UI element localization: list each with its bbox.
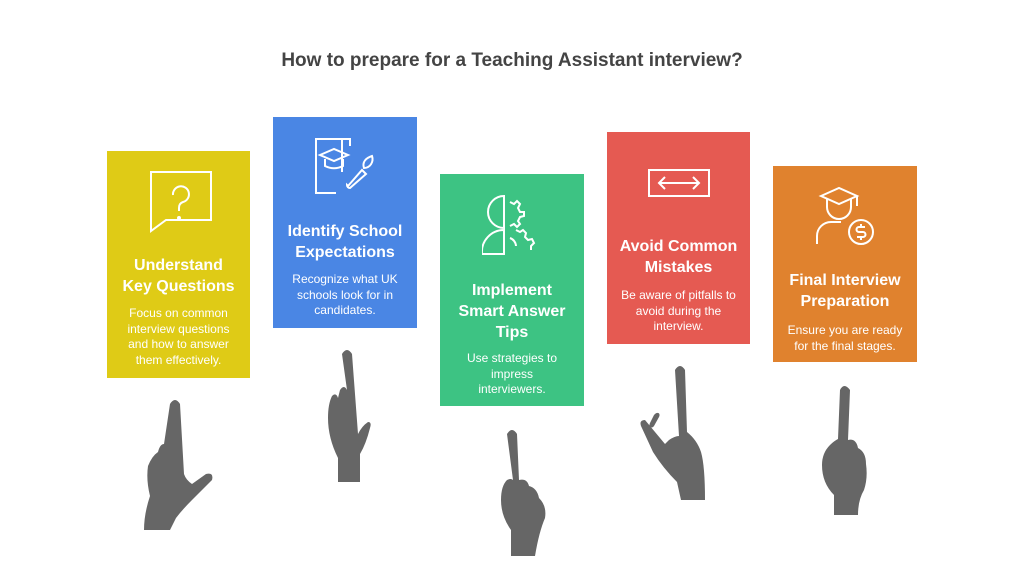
text: Be aware of pitfalls to avoid during the interview.	[621, 288, 736, 333]
text: Recognize what UK schools look for in candidates.	[292, 272, 398, 317]
heading	[288, 223, 402, 261]
heading	[458, 282, 566, 341]
hand 4	[640, 366, 705, 500]
heading: Smart Answer	[458, 303, 566, 320]
heading: Implement	[472, 282, 552, 299]
icon: document with cap and brush	[315, 138, 374, 194]
panel: final interview preparation	[773, 166, 917, 362]
heading	[122, 257, 235, 295]
heading: Identify School	[288, 223, 402, 240]
heading: Expectations	[295, 244, 395, 261]
text: Use strategies to impress interviewers.	[467, 351, 557, 396]
title: How to prepare for a Teaching Assistant interview?	[281, 50, 743, 71]
text: Ensure you are ready for the final stages.	[788, 323, 902, 352]
hand 1	[144, 400, 212, 530]
panel: understand key questions	[107, 151, 250, 378]
panel: identify school expectations	[273, 117, 417, 328]
heading	[620, 238, 737, 276]
icon: head with gears	[482, 195, 536, 255]
icon: graduate with coin	[816, 186, 874, 245]
text: Focus on common interview questions and how to answer them effectively.	[127, 306, 230, 366]
panel: avoid common mistakes	[607, 132, 750, 344]
heading: Preparation	[801, 293, 889, 310]
hand 2	[328, 350, 371, 482]
hand 5	[822, 386, 867, 515]
heading: Key Questions	[122, 278, 235, 295]
heading: Tips	[496, 324, 528, 341]
heading: Understand	[134, 257, 223, 274]
icon: question bubble	[150, 171, 212, 233]
heading: Avoid Common	[620, 238, 737, 255]
icon: double arrow box	[648, 169, 710, 197]
heading: Final Interview	[789, 272, 901, 289]
hand 3	[501, 430, 545, 556]
heading	[789, 272, 901, 310]
panel: implement smart answer tips	[440, 174, 584, 406]
heading: Mistakes	[645, 259, 712, 276]
